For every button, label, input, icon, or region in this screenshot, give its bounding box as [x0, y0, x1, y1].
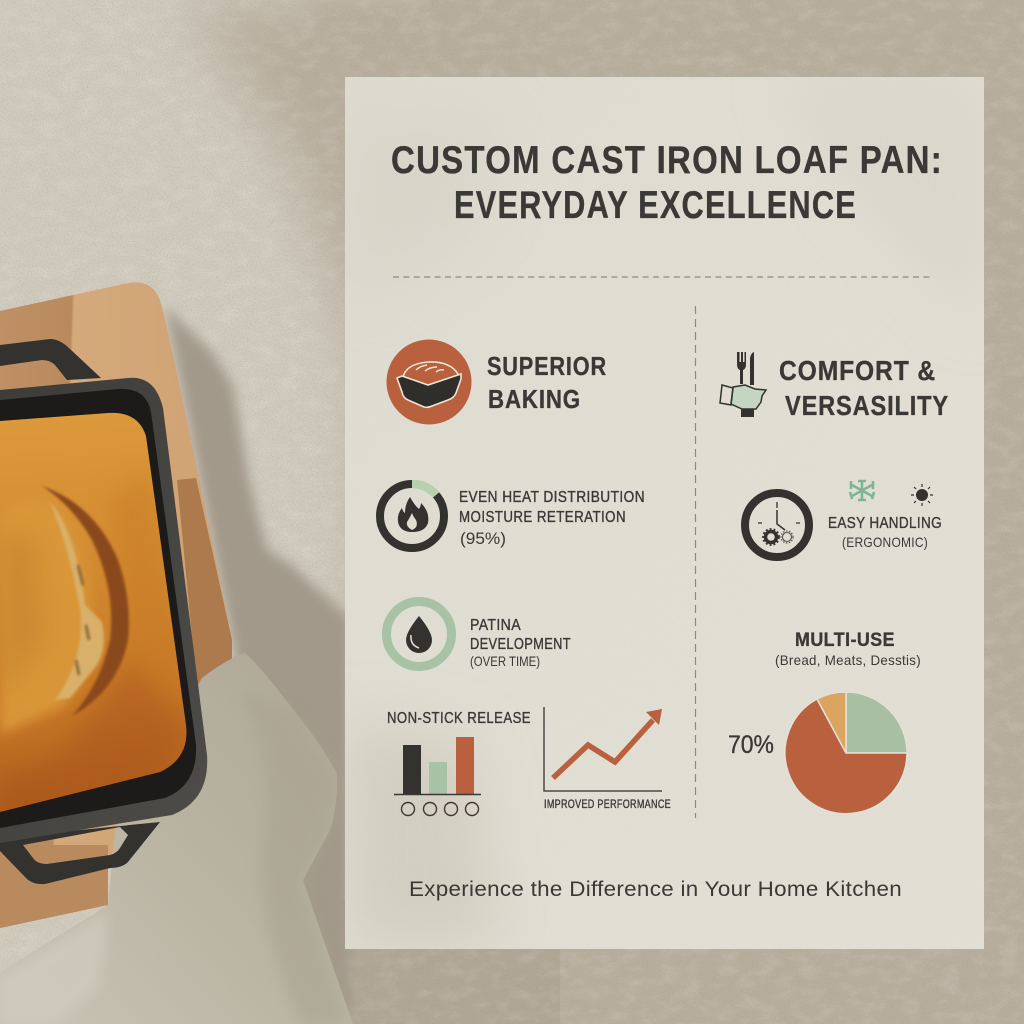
- icon: flame progress ring: [380, 484, 444, 548]
- heading: comfort and versatility: VERSASILITY: [785, 390, 949, 421]
- text: patina development: [470, 617, 571, 669]
- icon: hand holding fork and knife: [720, 352, 766, 417]
- icon: clock with gears: [745, 493, 809, 557]
- heading: superior baking: BAKING: [488, 384, 581, 414]
- text: multi-use: MULTI-USE: [795, 630, 895, 651]
- pie chart: [785, 692, 907, 814]
- heading: non-stick release: NON-STICK RELEASE: [387, 710, 531, 727]
- text: even heat and moisture: MOISTURE RETERATION: [459, 509, 626, 526]
- icon: green snowflake: [850, 480, 874, 501]
- icon: sun: [911, 484, 933, 506]
- heading: superior baking: SUPERIOR: [487, 351, 607, 381]
- line chart: improved performance: IMPROVED PERFORMANCE: [544, 799, 671, 811]
- heading: comfort and versatility: COMFORT &: [779, 355, 936, 386]
- text: patina development: (OVER TIME): [470, 653, 540, 669]
- text: easy handling: (ERGONOMIC): [842, 534, 928, 550]
- icon: oil drop ring: [386, 602, 452, 666]
- towel: [0, 653, 353, 1024]
- pan bottom handle: [0, 822, 160, 884]
- wooden cutting board: [0, 282, 232, 928]
- text: multi-use: (Bread, Meats, Desstis): [775, 652, 921, 668]
- heading: comfort and versatility: [779, 355, 949, 421]
- poster panel: [345, 77, 984, 949]
- text: easy handling: [828, 515, 942, 550]
- loaf dome and slash: [0, 524, 89, 736]
- text: even heat and moisture: (95%): [460, 529, 506, 548]
- bar chart: [394, 737, 481, 816]
- text: multi-use: [775, 630, 921, 668]
- cast shadow of board and pan on cloth: [165, 306, 350, 1024]
- text: patina development: DEVELOPMENT: [470, 636, 571, 653]
- text: even heat and moisture: EVEN HEAT DISTRIBUTION: [459, 489, 645, 506]
- loaf: [0, 412, 186, 812]
- text: easy handling: EASY HANDLING: [828, 515, 942, 532]
- text: even heat and moisture: [459, 489, 645, 548]
- pan body: [0, 378, 207, 843]
- title: EVERYDAY EXCELLENCE: [454, 184, 857, 227]
- cast iron loaf pan with bread: [0, 339, 207, 884]
- pan top handle: [0, 339, 101, 380]
- line chart: improved performance: [544, 707, 671, 811]
- title: [391, 139, 943, 227]
- footer tagline: Experience the Difference in Your Home Kitchen: [409, 878, 902, 901]
- label: 70 percent: 70%: [728, 731, 774, 759]
- heading: superior baking: [487, 351, 607, 414]
- text: patina development: PATINA: [470, 617, 521, 634]
- icon: loaf pan in terracotta circle: [386, 340, 472, 424]
